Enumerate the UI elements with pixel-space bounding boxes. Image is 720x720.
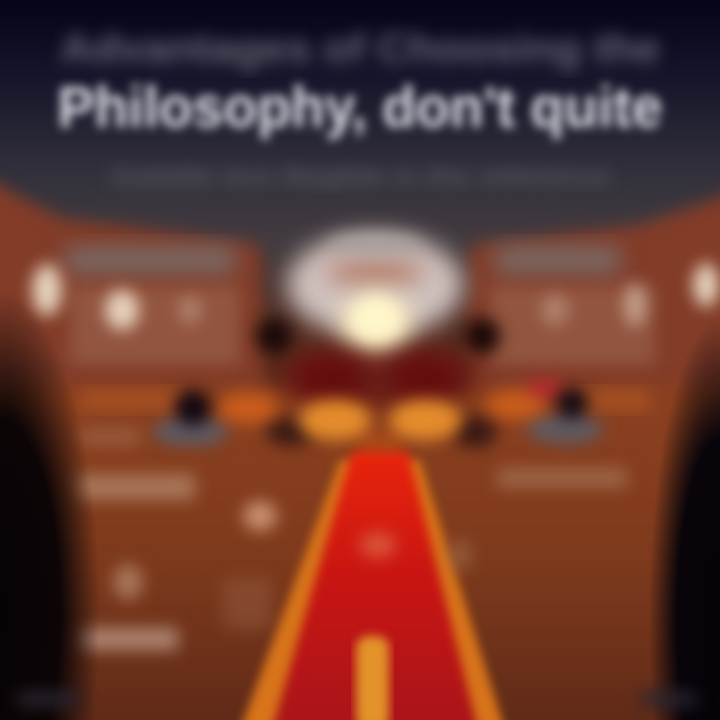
dark red base under the orb — [278, 343, 478, 407]
right dark foreground silhouette — [625, 320, 720, 720]
dark red arch under the orb — [294, 358, 461, 398]
central glowing orb — [287, 233, 463, 350]
wall lights, left — [32, 264, 202, 330]
bottom corner marks — [18, 692, 696, 706]
red carpet with gold borders — [240, 452, 505, 720]
left dark foreground silhouette — [0, 290, 133, 720]
dark lamps flanking the orb — [256, 318, 500, 354]
wall lights, right — [541, 263, 719, 327]
left wall panel heading — [65, 248, 235, 272]
title text, main line: Philosophy, don't quite — [58, 75, 662, 140]
right floor labels — [448, 468, 627, 571]
golden bow — [299, 400, 461, 459]
wall bands — [80, 388, 650, 412]
right wall — [465, 190, 720, 400]
title text, first line: Advantages of Choosing the — [60, 27, 660, 71]
left crowd figures — [152, 390, 314, 446]
right crowd figures — [453, 378, 603, 448]
left wall — [0, 175, 265, 400]
left floor labels — [75, 428, 277, 650]
right wall panel heading — [495, 248, 620, 272]
floor — [0, 385, 720, 720]
subtitle text: Subtitle text illegible in the reference — [110, 163, 610, 190]
